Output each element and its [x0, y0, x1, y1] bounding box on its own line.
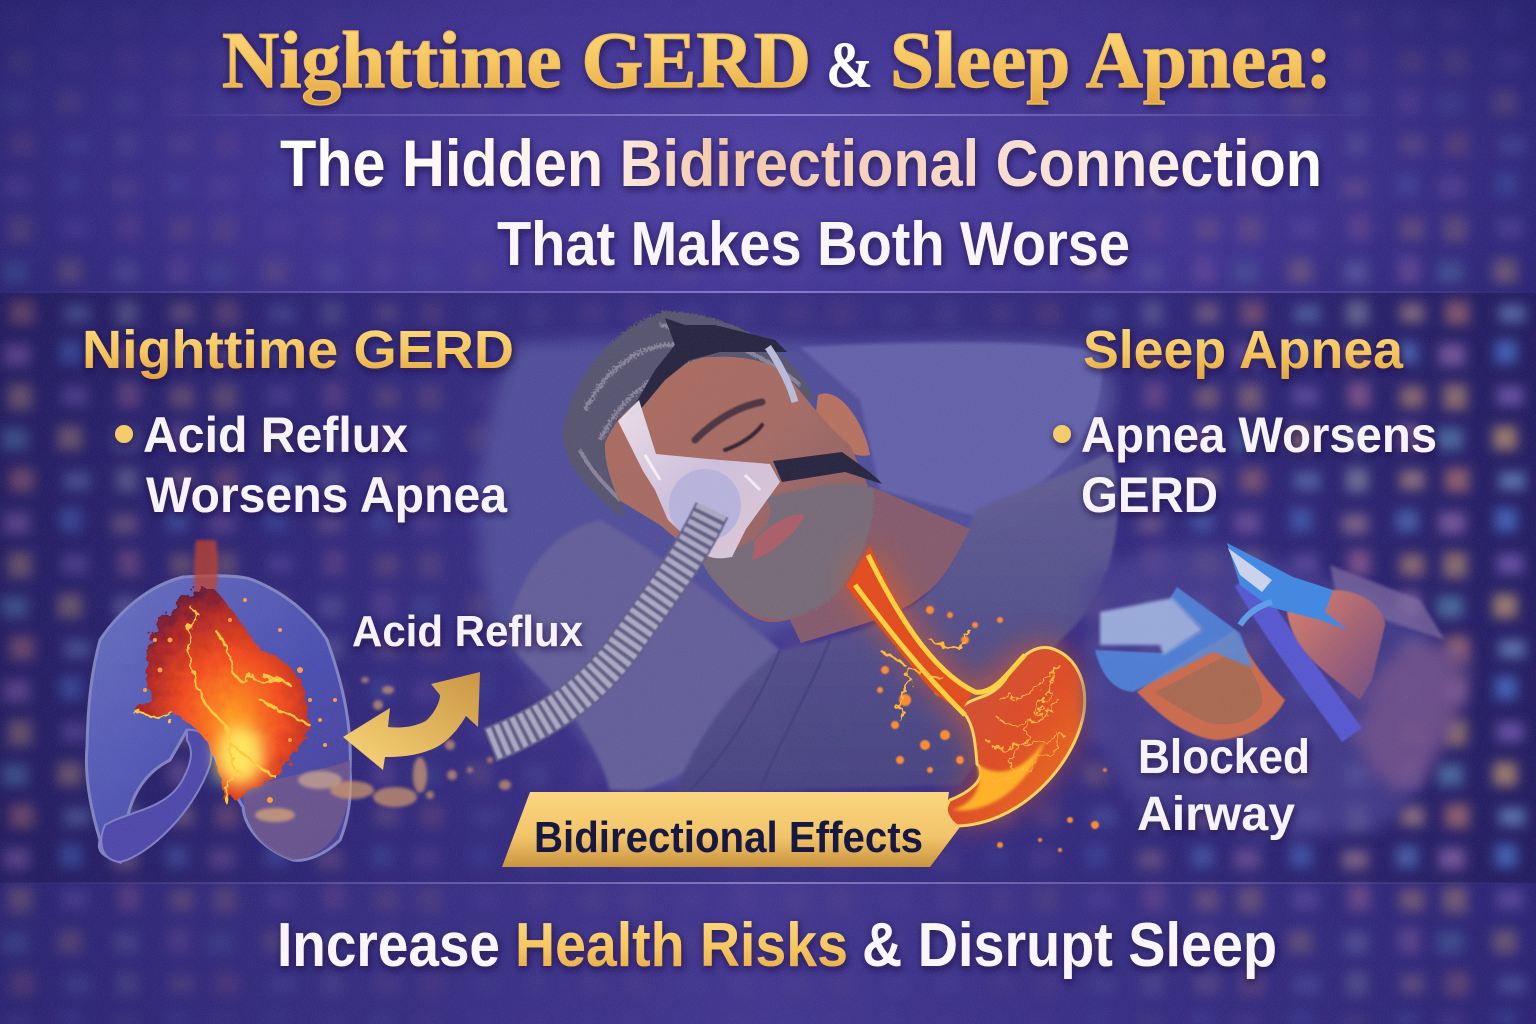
sleeve	[1330, 565, 1445, 640]
right panel heading and text: GERD	[1081, 467, 1218, 523]
beard	[700, 484, 874, 618]
left panel heading and text: Acid Reflux	[143, 407, 408, 463]
neck	[790, 486, 970, 643]
hand	[1287, 590, 1385, 700]
label: blocked airway	[1137, 731, 1310, 841]
lower right transparent lobe	[243, 760, 350, 860]
banner: bidirectional effects: Bidirectional Effects	[534, 813, 923, 862]
subtitle	[280, 126, 1322, 279]
CPAP hose	[490, 510, 712, 745]
blue upper clip	[1227, 543, 1348, 630]
title: &	[826, 29, 873, 102]
hair	[563, 311, 815, 520]
CPAP mask	[618, 400, 780, 558]
shirt	[675, 450, 1118, 792]
right panel heading and text	[1053, 320, 1437, 523]
esophagus	[846, 546, 974, 710]
left panel heading and text: Worsens Apnea	[146, 467, 508, 523]
pillow	[479, 339, 1111, 790]
subtitle: That Makes Both Worse	[497, 210, 1130, 279]
illustration: burning lungs	[86, 540, 350, 862]
ear	[815, 393, 870, 456]
title: Nighttime GERD	[222, 17, 811, 105]
left panel heading and text: Nighttime GERD	[82, 320, 514, 380]
fire	[135, 540, 310, 805]
left panel heading and text	[82, 320, 514, 523]
right panel heading and text: Sleep Apnea	[1083, 320, 1404, 380]
footer statement: Health Risks	[515, 911, 848, 980]
smoke inside lower lobe	[255, 771, 342, 822]
title: Sleep Apnea:	[890, 17, 1332, 105]
sparks and glow beside lungs	[330, 677, 511, 807]
closed eye and brow	[695, 402, 762, 450]
title	[222, 17, 1332, 105]
headgear strap	[626, 318, 882, 484]
footer statement	[277, 911, 1277, 980]
illustration: burning esophagus and stomach	[846, 546, 1107, 852]
orange throat	[1137, 630, 1285, 740]
blue tube	[1245, 580, 1352, 735]
illustration: blocked airway	[1085, 543, 1469, 840]
face	[605, 357, 874, 622]
illustration: sleeping man with CPAP mask	[479, 311, 1118, 792]
footer statement: & Disrupt Sleep	[862, 911, 1277, 980]
mouth	[752, 515, 805, 560]
airway curl	[101, 730, 211, 862]
footer statement: Increase	[277, 911, 500, 980]
label: blocked airway: Airway	[1137, 788, 1295, 841]
stomach	[946, 647, 1085, 826]
subtitle: The Hidden Bidirectional Connection	[280, 126, 1322, 200]
banner: bidirectional effects	[502, 792, 960, 867]
lung outline	[86, 576, 350, 862]
blue airway arrow and plate	[1095, 587, 1253, 692]
label: acid reflux: Acid Reflux	[352, 607, 584, 656]
label: blocked airway: Blocked	[1138, 731, 1310, 784]
right panel heading and text: Apnea Worsens	[1081, 407, 1437, 463]
icon: double-headed gold arrow	[343, 672, 480, 770]
divider above footer	[0, 882, 1536, 884]
forearm	[1360, 645, 1469, 789]
